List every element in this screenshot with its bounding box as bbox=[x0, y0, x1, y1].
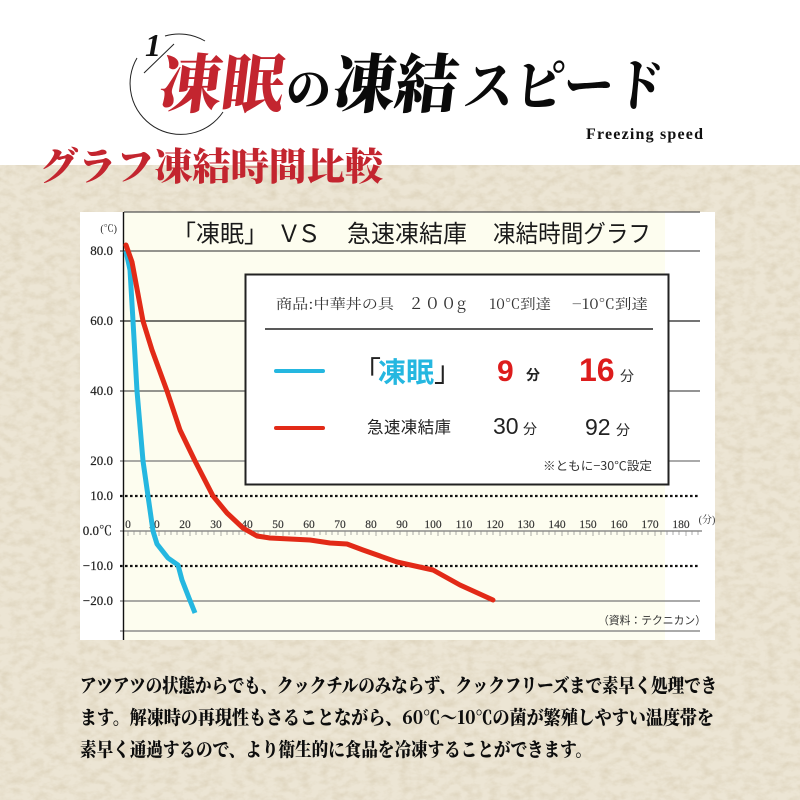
row: 凍眠: 分 bbox=[620, 366, 634, 386]
y axis labels: −10.0 bbox=[83, 558, 113, 573]
row: 凍眠: 分 bbox=[526, 365, 540, 385]
x axis labels: 60 bbox=[303, 519, 315, 531]
x axis labels: 120 bbox=[486, 519, 504, 531]
red curve bbox=[126, 245, 493, 600]
x axis labels: 10 bbox=[148, 519, 160, 531]
title black words bbox=[286, 34, 669, 126]
y axis labels: 60.0 bbox=[90, 313, 113, 328]
subtitle: Freezing speed bbox=[586, 126, 703, 143]
row: 急速凍結庫: 分 bbox=[523, 419, 537, 439]
row: 凍眠: 9 bbox=[497, 355, 514, 388]
x axis labels: 100 bbox=[424, 519, 442, 531]
blue curve bbox=[126, 251, 195, 613]
y axis bbox=[122, 212, 124, 640]
x axis labels: 40 bbox=[241, 519, 253, 531]
row: 急速凍結庫: 急速凍結庫 bbox=[367, 414, 451, 438]
table header: ２００g bbox=[408, 291, 466, 314]
row: 凍眠: 」 bbox=[434, 350, 462, 390]
x axis labels: 0 bbox=[125, 519, 131, 531]
x axis labels: 160 bbox=[610, 519, 628, 531]
row: 凍眠: 凍眠 bbox=[378, 351, 434, 391]
chart title: 急速凍結庫 bbox=[347, 214, 467, 249]
y axis labels: 80.0 bbox=[90, 243, 113, 258]
title black words: スピード bbox=[461, 41, 669, 123]
row: 凍眠 bbox=[276, 350, 634, 391]
table header bbox=[276, 291, 648, 314]
row: 急速凍結庫: 分 bbox=[616, 420, 630, 440]
grid lines bbox=[120, 212, 702, 631]
row: 凍眠: 「 bbox=[353, 350, 381, 390]
x axis ticks bbox=[128, 531, 698, 536]
y axis labels: 10.0 bbox=[90, 488, 113, 503]
y axis labels: 20.0 bbox=[90, 453, 113, 468]
row: 凍眠: 16 bbox=[579, 352, 615, 388]
row: 急速凍結庫 bbox=[276, 413, 630, 440]
x axis labels: 140 bbox=[548, 519, 566, 531]
x axis labels: 150 bbox=[579, 519, 597, 531]
body text: 素早く通過するので、より衛生的に食品を冷凍することができます。 bbox=[80, 735, 592, 762]
source note: （資料：テクニカン） bbox=[598, 612, 706, 628]
y axis labels bbox=[83, 223, 117, 608]
chart title: 「凍眠」 bbox=[172, 214, 268, 249]
x axis labels: 20 bbox=[179, 519, 191, 531]
y axis labels: 0.0℃ bbox=[83, 523, 112, 538]
title black words: 凍結 bbox=[329, 34, 464, 126]
row: 急速凍結庫: 30 bbox=[493, 413, 519, 439]
x axis labels: 130 bbox=[517, 519, 535, 531]
title ring ornament bbox=[130, 34, 223, 134]
body text: アツアツの状態からでも、クックチルのみならず、クックフリーズまで素早く処理でき bbox=[80, 671, 717, 698]
x axis labels: 170 bbox=[641, 519, 659, 531]
table header: −10℃到達 bbox=[572, 294, 648, 314]
table header: 10℃到達 bbox=[489, 294, 551, 314]
chart title: 凍結時間グラフ bbox=[493, 214, 651, 249]
chart title: ＶＳ bbox=[277, 214, 321, 249]
section heading: グラフ凍結時間比較 bbox=[40, 136, 386, 191]
title bbox=[130, 27, 703, 143]
x axis labels bbox=[125, 513, 715, 531]
y axis labels: −20.0 bbox=[83, 593, 113, 608]
x axis labels: 110 bbox=[456, 519, 473, 531]
title black words: の bbox=[286, 53, 331, 118]
title number: 1 bbox=[145, 27, 161, 63]
chart title bbox=[172, 214, 651, 249]
footnote: ※ともに−30℃設定 bbox=[543, 457, 652, 474]
x axis labels: (分) bbox=[699, 513, 715, 526]
chart panel bbox=[80, 212, 715, 640]
table header: 商品:中華丼の具 bbox=[276, 294, 395, 314]
legend box bbox=[246, 274, 668, 484]
y axis labels: (℃) bbox=[100, 223, 117, 235]
paper background bbox=[0, 165, 800, 800]
x axis labels: 50 bbox=[272, 519, 284, 531]
x axis labels: 90 bbox=[396, 519, 408, 531]
y axis labels: 40.0 bbox=[90, 383, 113, 398]
x axis labels: 80 bbox=[365, 519, 377, 531]
body text bbox=[80, 671, 717, 762]
row: 急速凍結庫: 92 bbox=[585, 414, 611, 440]
body text: ます。解凍時の再現性もさることながら、60℃～10℃の菌が繁殖しやすい温度帯を bbox=[80, 703, 714, 730]
x axis labels: 180 bbox=[672, 519, 690, 531]
title red words: 凍眠 bbox=[155, 34, 292, 126]
x axis labels: 70 bbox=[334, 519, 346, 531]
x axis labels: 30 bbox=[210, 519, 222, 531]
